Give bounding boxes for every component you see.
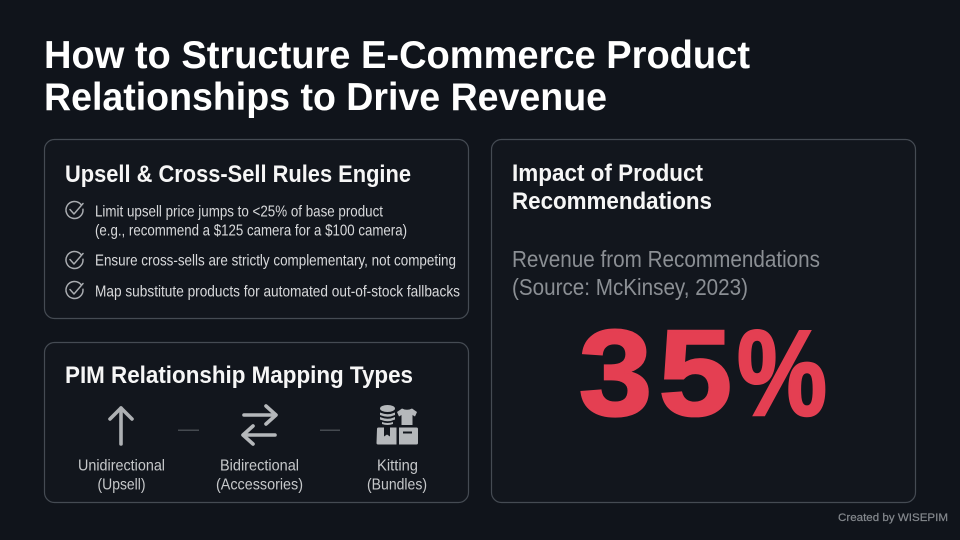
label: kitting: (Bundles) [367,476,427,494]
panel: PIM relationship mapping [44,342,468,502]
label: unidirectional: Unidirectional [78,458,165,474]
metric label [512,246,820,300]
label: unidirectional [78,458,165,494]
rule text 1: Limit upsell price jumps to <25% of base product [95,204,383,220]
panel: upsell and cross-sell rules [44,140,468,318]
label: bidirectional: Bidirectional [220,458,299,474]
icon: check 3 [66,281,83,298]
heading: impact [512,160,712,215]
label: kitting: Kitting [377,458,418,474]
icon: check 1 [66,201,83,218]
icon: kitting bundle [376,405,418,444]
rule text 3: Map substitute products for automated out-of-stock fallbacks [95,284,460,300]
heading: rules engine: Upsell & Cross-Sell Rules Engine [65,161,411,188]
panel: impact of recommendations [492,140,916,502]
rule text 2: Ensure cross-sells are strictly complementary, not competing [95,252,456,270]
connector dash 1 [178,430,199,431]
rule text 1 [95,204,407,240]
big number: 35%: 35 [579,305,732,441]
metric label: Revenue from Recommendations [512,246,820,272]
label: bidirectional: (Accessories) [216,476,303,494]
heading: impact: Impact of Product [512,160,703,187]
icon: check 2 [66,251,83,268]
big number: 35%: % [737,305,827,441]
icon: bidirectional arrows [243,406,276,444]
big number: 35% [579,305,827,441]
metric label: (Source: McKinsey, 2023) [512,274,748,300]
heading: impact: Recommendations [512,188,712,215]
icon: up arrow [110,408,132,444]
rule text 1: (e.g., recommend a $125 camera for a $100 camera) [95,222,407,240]
heading: PIM types: PIM Relationship Mapping Types [65,362,413,389]
connector dash 2 [320,430,340,431]
footer credit: Created by WISEPIM [838,512,948,524]
label: bidirectional [216,458,303,494]
title: How to Structure E-Commerce Product [44,34,750,77]
title: Relationships to Drive Revenue [44,76,607,119]
title [44,34,750,119]
label: unidirectional: (Upsell) [98,476,146,494]
label: kitting [367,458,427,494]
